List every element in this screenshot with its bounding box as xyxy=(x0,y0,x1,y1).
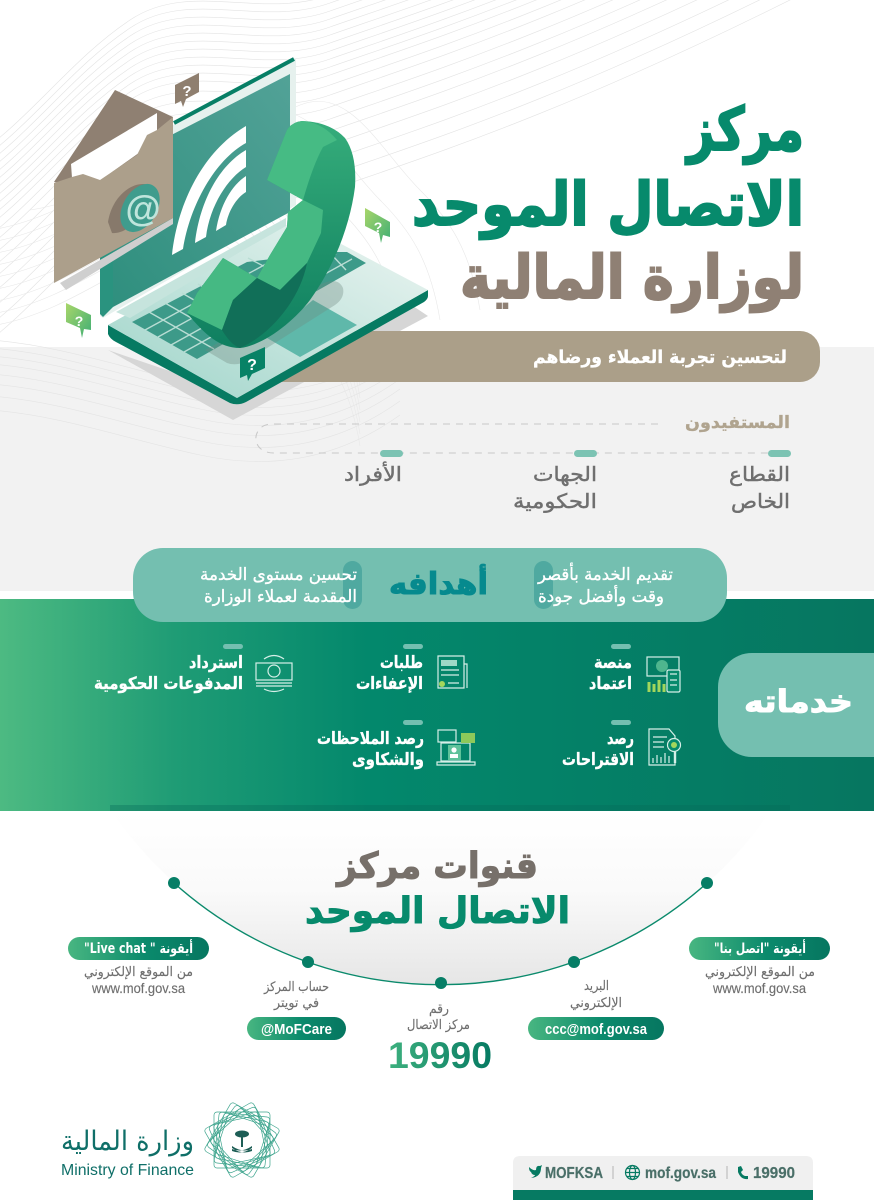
title xyxy=(412,95,804,313)
channel: email: البريد xyxy=(584,979,609,994)
footer contact bar: mof.gov.sa xyxy=(645,1165,716,1182)
title: مركز xyxy=(685,95,804,165)
goals heading: أهدافه xyxy=(389,564,488,602)
logo rosette xyxy=(204,1102,280,1178)
service: exemption requests xyxy=(356,644,467,694)
channel: email xyxy=(528,979,664,1040)
footer contact bar: 19990 xyxy=(753,1165,795,1182)
channels arc with nodes xyxy=(168,877,713,989)
service: monitoring suggestions: رصد xyxy=(607,729,634,749)
title: لوزارة المالية xyxy=(460,243,804,313)
icon: document and pen xyxy=(438,656,467,688)
channel: live chat: www.mof.gov.sa xyxy=(91,980,185,996)
section: beneficiaries xyxy=(256,413,791,513)
icon: money and calculator xyxy=(647,657,680,692)
channels heading xyxy=(305,846,570,932)
service: monitoring notes and complaints: رصد الملاحظات xyxy=(317,729,424,749)
services tab xyxy=(718,653,874,757)
goal one: تقديم الخدمة بأقصر xyxy=(537,562,673,585)
icon: palm and swords xyxy=(232,1130,252,1152)
icon: globe xyxy=(626,1166,640,1180)
laptop base xyxy=(108,220,428,404)
icon: green question bubble left: ? xyxy=(75,313,83,329)
label: government entities xyxy=(513,462,597,513)
icon: report with magnifier xyxy=(649,729,680,765)
label: individuals: الأفراد xyxy=(344,462,402,486)
icon: phone handset xyxy=(187,121,355,348)
logo: Ministry of Finance: Ministry of Finance xyxy=(61,1162,194,1179)
channel: email: الإلكتروني xyxy=(570,996,622,1011)
service: government payment refunds xyxy=(94,644,292,694)
icon: green question bubble right: ? xyxy=(374,219,382,235)
call centre number value: 19990 xyxy=(388,1035,492,1076)
illustration: laptop, phone handset and envelope xyxy=(54,58,428,404)
service: government payment refunds: المدفوعات الحكومية xyxy=(94,674,243,694)
service: accreditation platform: اعتماد xyxy=(589,674,632,694)
subtitle ribbon xyxy=(280,331,820,382)
channel: contact us: من الموقع الإلكتروني xyxy=(705,965,815,980)
label: government entities: الحكومية xyxy=(513,489,597,513)
marker: government xyxy=(574,450,597,457)
channel: contact us: أيقونة "اتصل بنا" xyxy=(714,939,806,957)
channel: live chat: من الموقع الإلكتروني xyxy=(84,965,193,980)
grey section background xyxy=(0,347,874,591)
footer contact bar: MOFKSA xyxy=(545,1165,603,1182)
icon: phone xyxy=(738,1166,748,1179)
service: accreditation platform xyxy=(589,644,680,694)
goal one: وقت وأفضل جودة xyxy=(538,585,664,607)
green services band xyxy=(0,599,874,811)
logo: Ministry of Finance: وزارة المالية xyxy=(61,1126,194,1157)
channels dome xyxy=(112,812,770,984)
label: private sector: الخاص xyxy=(731,489,790,513)
service: exemption requests: طلبات xyxy=(380,653,423,673)
icon: dark green question bubble bottom: ? xyxy=(247,357,257,374)
service: government payment refunds: استرداد xyxy=(189,653,243,673)
channel: live chat: أيقونة " Live chat" xyxy=(84,939,193,957)
icon: dark green question bubble bottom xyxy=(240,347,265,381)
service: exemption requests: الإعفاءات xyxy=(356,674,423,694)
icon: brown question bubble: ? xyxy=(182,83,192,100)
service: monitoring suggestions xyxy=(562,720,680,770)
laptop shadow xyxy=(108,306,428,420)
footer contact bar xyxy=(513,1156,813,1200)
icon: banknotes xyxy=(256,656,292,692)
channel: contact us: www.mof.gov.sa xyxy=(712,980,806,996)
channel: twitter account: في تويتر xyxy=(273,996,319,1011)
laptop screen xyxy=(100,58,296,318)
marker: individuals xyxy=(380,450,403,457)
phone shadow xyxy=(205,281,343,364)
service: accreditation platform: منصة xyxy=(594,653,632,673)
channel: call centre number: رقم xyxy=(429,1002,449,1017)
title: الاتصال الموحد xyxy=(412,170,804,240)
channels heading: قنوات مركز xyxy=(335,846,538,887)
channel: twitter account xyxy=(247,980,346,1040)
channels heading: الاتصال الموحد xyxy=(305,891,570,932)
channel: call centre number: مركز الاتصال xyxy=(407,1018,470,1033)
goal one xyxy=(537,562,673,607)
icon: twitter xyxy=(529,1165,542,1178)
envelope shadow xyxy=(60,218,173,290)
beneficiaries heading: المستفيدون xyxy=(685,413,790,433)
icon: envelope with at sign: @ xyxy=(125,188,161,229)
channel: contact us xyxy=(689,937,830,996)
label: government entities: الجهات xyxy=(533,462,597,486)
services heading: خدماته xyxy=(744,684,853,720)
goal two xyxy=(200,565,357,607)
service: monitoring notes and complaints xyxy=(317,720,475,770)
icon: brown question bubble xyxy=(175,73,199,107)
channel: twitter account: حساب المركز xyxy=(263,980,329,995)
label: private sector: القطاع xyxy=(729,462,790,486)
icon: green question bubble left xyxy=(66,303,91,338)
label: private sector xyxy=(729,462,790,513)
marker: private sector xyxy=(768,450,791,457)
icon: wifi arcs xyxy=(172,126,246,255)
service: monitoring notes and complaints: والشكاوى xyxy=(352,750,424,770)
channel: live chat xyxy=(68,937,209,996)
channel: email: ccc@mof.gov.sa xyxy=(545,1021,648,1038)
icon: laptop with user and chat xyxy=(437,730,475,765)
logo: Ministry of Finance xyxy=(61,1102,280,1179)
goal two: تحسين مستوى الخدمة xyxy=(200,565,357,585)
subtitle text: لتحسين تجربة العملاء ورضاهم xyxy=(533,347,787,368)
icon: green question bubble right xyxy=(365,208,390,243)
channel: call centre number xyxy=(388,1002,492,1076)
service: monitoring suggestions: الاقتراحات xyxy=(562,750,634,770)
panel: goals xyxy=(133,548,727,622)
goal two: المقدمة لعملاء الوزارة xyxy=(204,587,357,607)
icon: envelope with at sign xyxy=(54,90,173,283)
channel: twitter account: @MoFCare xyxy=(261,1021,332,1038)
